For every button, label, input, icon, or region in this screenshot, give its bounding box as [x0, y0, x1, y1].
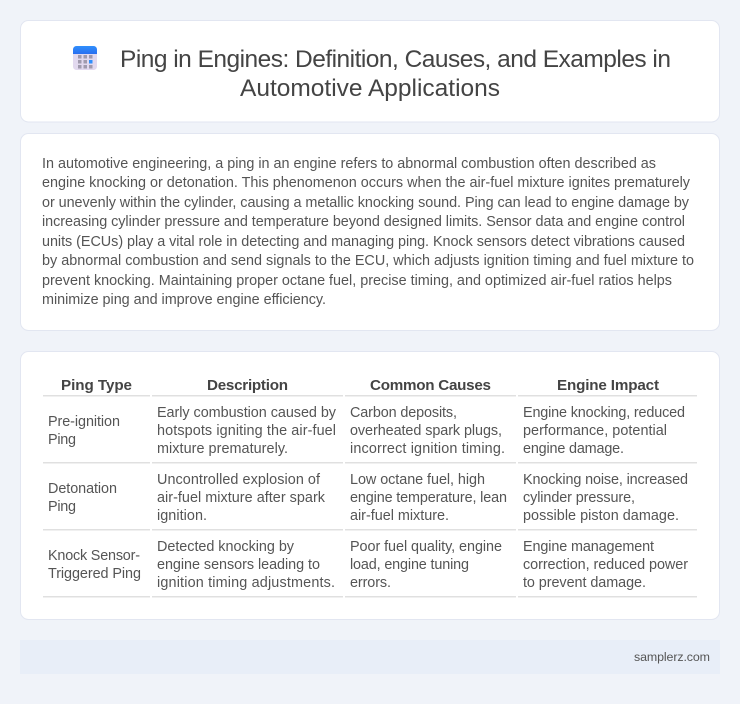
- text block: definition paragraph: units (ECUs) play a vital role in detecting and managing ping. Knock sensors detect vibrations caused: [42, 234, 685, 250]
- table row: pre-ignition ping: hotspots igniting the air-fuel: [157, 423, 336, 439]
- text block: definition paragraph: [42, 156, 694, 308]
- table row: knock sensor-triggered ping: errors.: [350, 575, 391, 591]
- table row: pre-ignition ping: mixture prematurely.: [157, 441, 288, 457]
- footer: samplerz.com: [634, 650, 710, 664]
- table header row: Common Causes: [370, 377, 491, 394]
- icon: calendar: [73, 46, 97, 70]
- table row: knock sensor-triggered ping: [48, 539, 688, 591]
- text block: definition paragraph: minimize ping and improve engine efficiency.: [42, 292, 326, 308]
- table row: knock sensor-triggered ping: Engine management: [523, 539, 654, 555]
- table row: detonation ping: Uncontrolled explosion of: [157, 472, 321, 488]
- table header row: Engine Impact: [557, 377, 659, 394]
- table row: detonation ping: [48, 472, 688, 524]
- panel: intro paragraph: [20, 134, 720, 330]
- text block: definition paragraph: In automotive engineering, a ping in an engine refers to abnormal combustion often described as: [42, 156, 656, 172]
- table header row: Description: [207, 377, 288, 394]
- table row: detonation ping: Low octane fuel, high: [350, 472, 485, 488]
- text block: definition paragraph: increasing cylinder pressure and temperature beyond designed limits. Sensor data and engine control: [42, 214, 685, 230]
- title: [120, 46, 671, 102]
- table row: pre-ignition ping: Engine knocking, reduced: [523, 405, 685, 421]
- table row: detonation ping: air-fuel mixture after spark: [157, 490, 326, 506]
- table row: detonation ping: Detonation: [48, 481, 117, 497]
- panel: header: [20, 20, 720, 122]
- table row: knock sensor-triggered ping: load, engine tuning: [350, 557, 469, 573]
- table row: pre-ignition ping: overheated spark plugs,: [350, 423, 502, 439]
- table row: pre-ignition ping: performance, potential: [523, 423, 667, 439]
- table row: detonation ping: ignition.: [157, 508, 207, 524]
- table row: detonation ping: Ping: [48, 499, 76, 515]
- table row: knock sensor-triggered ping: Triggered Ping: [48, 566, 141, 582]
- text block: definition paragraph: or unevenly within the cylinder, causing a metallic knocking sound. Ping can lead to engine damage by: [42, 195, 690, 211]
- table row: pre-ignition ping: Pre-ignition: [48, 414, 120, 430]
- table row: pre-ignition ping: Early combustion caused by: [157, 405, 337, 421]
- table row: knock sensor-triggered ping: Detected knocking by: [157, 539, 295, 555]
- text block: definition paragraph: prevent knocking. Maintaining proper octane fuel, precise timing, and optimized air-fuel ratios helps: [42, 273, 672, 289]
- title: Ping in Engines: Definition, Causes, and Examples in: [120, 46, 671, 73]
- table header row: [61, 377, 659, 394]
- table row: knock sensor-triggered ping: ignition timing adjustments.: [157, 575, 335, 591]
- table row: knock sensor-triggered ping: Knock Sensor-: [48, 548, 140, 564]
- table row: pre-ignition ping: incorrect ignition timing.: [350, 441, 505, 457]
- title: Automotive Applications: [240, 75, 500, 102]
- table row: detonation ping: air-fuel mixture.: [350, 508, 449, 524]
- table row: detonation ping: Knocking noise, increased: [523, 472, 688, 488]
- table row: detonation ping: engine temperature, lean: [350, 490, 507, 506]
- table row: detonation ping: possible piston damage.: [523, 508, 679, 524]
- table header row: Ping Type: [61, 377, 132, 394]
- footer: [20, 640, 720, 674]
- table row: pre-ignition ping: Carbon deposits,: [350, 405, 457, 421]
- table row: knock sensor-triggered ping: Poor fuel quality, engine: [350, 539, 502, 555]
- panel: table: [20, 352, 720, 620]
- table row: pre-ignition ping: engine damage.: [523, 441, 624, 457]
- table row: knock sensor-triggered ping: correction, reduced power: [523, 557, 688, 573]
- table row: pre-ignition ping: Ping: [48, 432, 76, 448]
- text block: definition paragraph: engine knocking or detonation. This phenomenon occurs when the air-fuel mixture ignites prematurely: [42, 175, 691, 191]
- table row: knock sensor-triggered ping: to prevent damage.: [523, 575, 646, 591]
- table row: detonation ping: cylinder pressure,: [523, 490, 635, 506]
- table row: knock sensor-triggered ping: engine sensors leading to: [157, 557, 320, 573]
- table row: pre-ignition ping: [48, 405, 685, 457]
- text block: definition paragraph: by abnormal combustion and send signals to the ECU, which adjusts ignition timing and fuel mixture to: [42, 253, 694, 269]
